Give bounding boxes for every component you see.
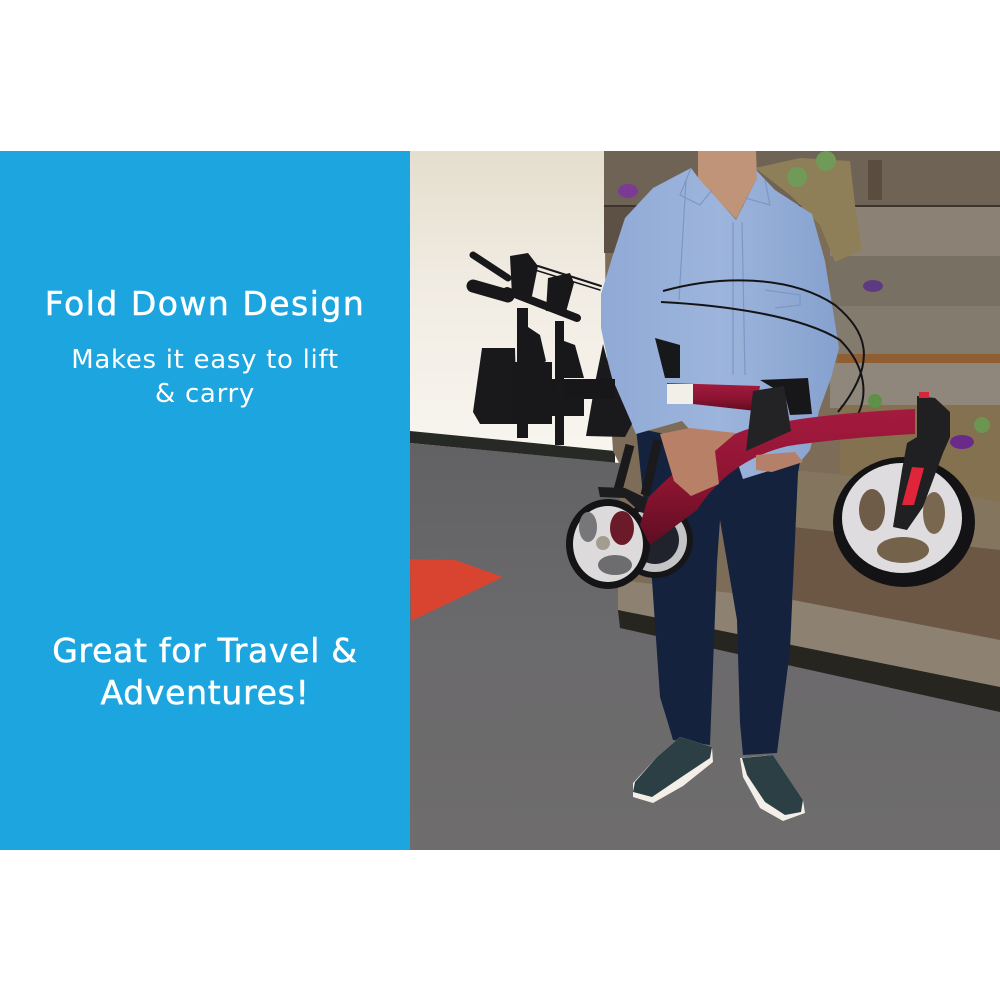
shoe right [740,755,805,821]
frame struts [618,440,658,495]
brake cables [661,280,864,420]
heading: great for travel and adventures: Adventures! [100,673,310,712]
seat frame cluster [586,344,632,437]
warning label [667,384,693,404]
heading: fold down design: Fold Down Design [45,284,365,323]
wood plank wall [604,151,1000,712]
shirt placket and folds [679,168,800,375]
small front wheel [566,499,650,589]
folded rollator [473,253,975,589]
uprights and brackets [510,253,584,445]
dark gap between arm and torso [655,338,680,378]
person [601,151,839,821]
red floor mat [410,559,503,621]
right hand [756,452,803,472]
wheel fork [893,396,950,530]
large wheel [833,457,975,587]
left hand [660,428,736,496]
wall [410,151,615,463]
second small wheel [617,502,693,578]
text block: makes it easy to lift and carry: Makes it easy to lift [71,345,339,375]
trousers [636,428,800,755]
crossbar [515,379,615,399]
green leaves and butterflies [618,151,990,449]
side box [473,348,517,424]
text block: makes it easy to lift and carry [71,345,339,409]
heading: great for travel and adventures: Great for Travel & [52,631,358,670]
text block: makes it easy to lift and carry: & carry [155,379,255,409]
red reflector [902,467,924,505]
photo: person carrying folded rollator [410,151,1000,850]
red knob [919,392,929,398]
fender [598,487,660,518]
frame bracket [746,378,812,451]
shirt [601,168,839,479]
lower red tube [640,409,915,545]
upper red tube [667,383,760,411]
handles [473,255,601,318]
panel: blue text panel [0,151,410,850]
neck [698,151,757,219]
shoe left [633,737,713,803]
heading: great for travel and adventures [52,631,358,712]
carpet floor [410,443,1000,850]
